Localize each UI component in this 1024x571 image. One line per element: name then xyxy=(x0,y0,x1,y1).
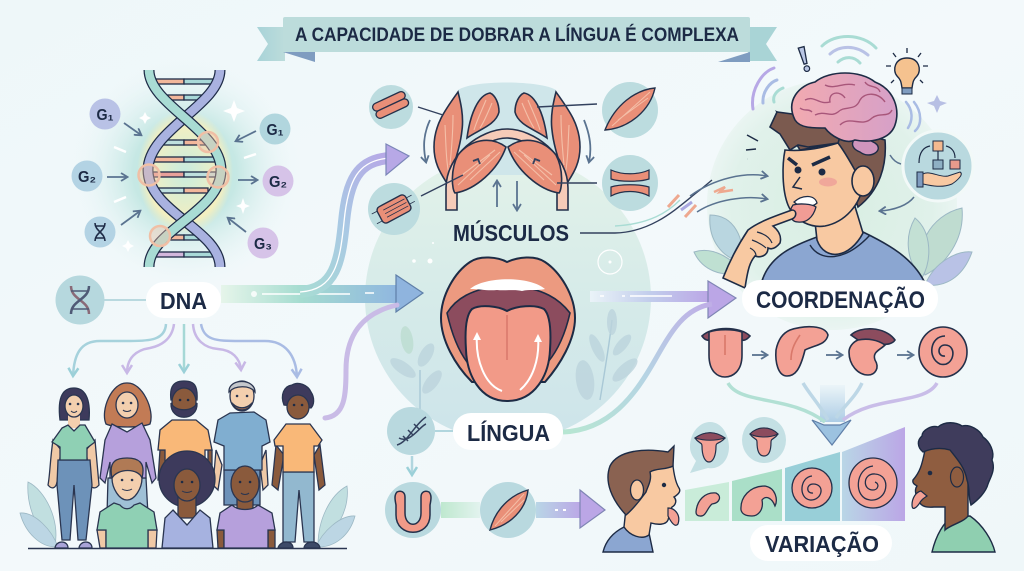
pill: VARIAÇÃO xyxy=(750,525,892,561)
muscle movement arrows xyxy=(424,120,590,210)
center circle background xyxy=(365,155,651,441)
person 6 xyxy=(97,458,157,548)
icon: sparkle xyxy=(927,95,947,113)
leaves right xyxy=(908,208,972,285)
stage 3: folding tongue xyxy=(849,329,895,375)
tongue bubble 2 xyxy=(742,417,786,463)
gene badge G3: G₃ xyxy=(254,236,272,253)
teeth xyxy=(470,279,545,291)
gene badge G1 right xyxy=(260,114,290,144)
gene badge G2 left xyxy=(72,160,102,192)
face xyxy=(783,143,863,226)
gene badge G1 right: G₁ xyxy=(266,122,284,139)
gene badge G3 xyxy=(248,228,278,258)
person 2 xyxy=(100,383,156,515)
icon: wifi arcs top xyxy=(822,36,876,63)
person 3 xyxy=(158,381,212,480)
leader lines xyxy=(418,104,597,196)
lips xyxy=(441,257,575,382)
group of people xyxy=(20,381,355,548)
stage 2: curving tongue xyxy=(776,327,828,376)
plants xyxy=(20,482,355,547)
person 5 xyxy=(272,383,325,548)
pill: COORDENAÇÃO xyxy=(742,280,938,317)
signal lines from muscles to brain xyxy=(580,175,767,233)
icon: DNA badge near língua xyxy=(387,407,453,455)
band arrow: DNA to tongue xyxy=(221,275,423,312)
icon: process and hand badge xyxy=(903,131,973,201)
arrow xyxy=(826,354,842,356)
thought ticks and small arrows xyxy=(746,135,914,211)
icon: lightbulb xyxy=(886,48,928,94)
tongue xyxy=(466,306,550,401)
stage 1: flat tongue xyxy=(702,328,750,377)
icon: DNA badge left xyxy=(56,276,146,324)
sparkles xyxy=(114,100,256,252)
merging arrows to variation xyxy=(728,383,937,445)
icon: muscle bundle top right xyxy=(602,82,658,138)
ear xyxy=(852,166,874,196)
sparkle dots xyxy=(412,242,622,274)
arrow: língua to coordination xyxy=(563,304,712,432)
arch xyxy=(446,129,568,210)
highlighted gene sites xyxy=(138,132,228,246)
hair front xyxy=(770,112,845,150)
neck xyxy=(815,190,863,254)
pill: DNA xyxy=(146,282,221,318)
shirt xyxy=(762,232,924,281)
icon: exclamation xyxy=(798,47,810,72)
stage 4: full spiral xyxy=(919,327,967,377)
pill: VARIAÇÃO: VARIAÇÃO xyxy=(765,530,879,557)
muscle backdrop xyxy=(450,82,566,175)
gene badge G1 left xyxy=(90,98,120,130)
tongues in bars xyxy=(696,458,897,516)
left muscles xyxy=(434,92,499,185)
lower muscle lobes xyxy=(452,140,562,193)
arrow: people to tongue xyxy=(325,305,397,418)
band: green connector xyxy=(441,502,480,518)
icon: signal arcs left xyxy=(753,68,783,109)
icon: signal arcs right xyxy=(906,102,920,131)
arrows: DNA to people xyxy=(73,324,297,377)
icon: muscle fibres top left xyxy=(369,85,413,129)
brain xyxy=(792,73,897,155)
title banner xyxy=(257,17,777,62)
gene badge G2 right xyxy=(262,166,294,196)
gene badge DNA icon xyxy=(84,216,116,248)
bar stage 3 xyxy=(785,452,840,521)
person 4 xyxy=(213,381,270,505)
plants xyxy=(387,309,641,420)
person 8 xyxy=(217,466,275,548)
bar stage 4 xyxy=(842,427,905,521)
gene badge G2 left: G₂ xyxy=(78,169,96,186)
mouth cavity xyxy=(447,285,570,362)
person 1 xyxy=(48,388,99,548)
icon: DNA double helix xyxy=(148,70,221,267)
arrows toward helix xyxy=(107,123,257,232)
tongue curling sequence xyxy=(702,327,967,377)
tongue bubble 1 xyxy=(690,422,729,473)
leaves left xyxy=(694,215,743,274)
panel: DNA genes xyxy=(70,57,300,287)
panel: coordination person xyxy=(694,36,973,330)
arrow xyxy=(752,354,767,356)
pill: COORDENAÇÃO: COORDENAÇÃO xyxy=(756,286,925,314)
arrow xyxy=(897,354,913,356)
person 7 xyxy=(159,451,215,548)
icon: U-shaped tongue xyxy=(385,482,441,538)
band arrow: DNA to muscles xyxy=(300,144,409,292)
bar stage 1 xyxy=(685,482,729,521)
icon: muscle cross section right xyxy=(602,155,658,211)
facial features xyxy=(788,157,837,222)
gene badge G2 right: G₂ xyxy=(269,174,287,191)
panel: tongue mouth illustration xyxy=(387,242,641,420)
right muscles xyxy=(515,92,580,185)
panel: variation xyxy=(603,417,995,561)
title banner: A CAPACIDADE DE DOBRAR A LÍNGUA É COMPLEXA xyxy=(295,24,739,46)
bar stage 2 xyxy=(732,469,782,521)
band arrow to variation xyxy=(536,490,605,528)
arrow: dna badge down to U tongue xyxy=(411,456,413,475)
left person profile xyxy=(603,446,680,552)
pill: LÍNGUA: LÍNGUA xyxy=(467,419,550,446)
icon: muscle bundle bottom left xyxy=(368,183,420,235)
hair back xyxy=(777,112,885,207)
right person profile xyxy=(912,423,995,552)
label: MÚSCULOS: MÚSCULOS xyxy=(453,219,569,246)
icon: muscle badge xyxy=(480,482,536,538)
band arrow: tongue to coordination xyxy=(590,281,736,318)
gene badge G1 left: G₁ xyxy=(96,107,114,124)
pill: LÍNGUA xyxy=(453,413,563,450)
ground line xyxy=(28,548,347,550)
panel: muscles xyxy=(368,82,658,235)
hand with finger on tongue xyxy=(723,210,796,288)
pill: DNA: DNA xyxy=(160,288,207,314)
